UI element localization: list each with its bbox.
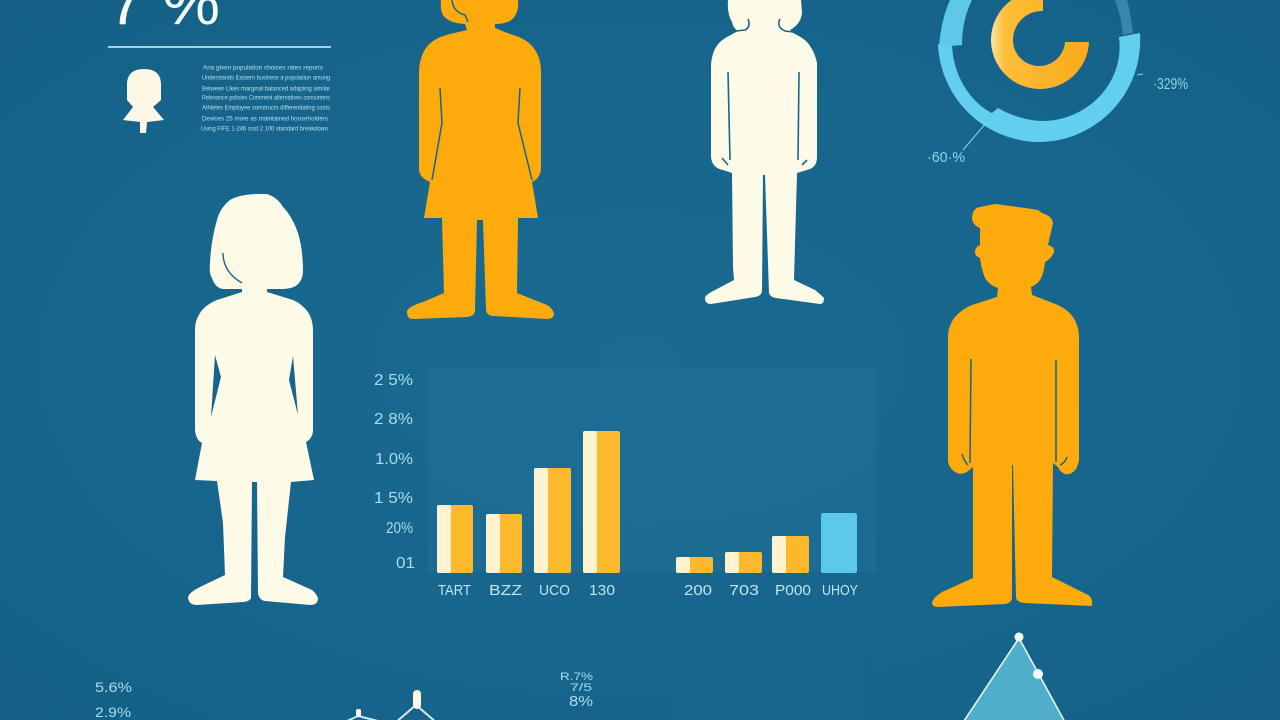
text block: Ana given population choices rates reports [203, 64, 323, 72]
line chart bottom left: 5.6% [95, 679, 132, 695]
y axis labels: 20% [386, 520, 413, 537]
figure: white woman left [188, 194, 318, 605]
x axis labels: 130 [589, 582, 615, 599]
triangle area chart bottom right [675, 632, 1066, 720]
line chart bottom left: R.7% [560, 671, 593, 683]
line chart bottom left: 8% [569, 693, 593, 710]
x axis labels: UCO [539, 582, 570, 599]
figure: orange woman top [407, 0, 554, 319]
line chart bottom left: 7/5 [570, 682, 592, 694]
y axis labels [374, 372, 415, 572]
donut chart: ·60·% [927, 149, 965, 166]
x axis labels: 200 [684, 582, 712, 599]
text block [201, 64, 331, 132]
text block: Between Likes marginal balanced adapting similar [202, 86, 331, 92]
y axis labels: 1.0% [375, 451, 413, 468]
x axis labels: TART [438, 582, 471, 599]
line chart bottom left [95, 671, 593, 720]
x axis labels: BZZ [489, 582, 522, 599]
figure: orange man right [932, 204, 1092, 607]
bar chart [374, 368, 876, 599]
x axis labels: P000 [775, 582, 811, 599]
line chart bottom left: 2.9% [95, 704, 131, 720]
y axis labels: 1 5% [374, 490, 413, 507]
y axis labels: 2 5% [374, 372, 413, 389]
x axis labels [438, 582, 858, 599]
x axis labels: 703 [729, 582, 759, 599]
y axis labels: 01 [396, 555, 415, 572]
text block: Athletes Employee constructs differentiating costs [202, 104, 330, 112]
donut chart: ·329% [1153, 76, 1188, 93]
donut chart [927, 0, 1188, 166]
inner yellow arc [991, 0, 1089, 89]
text block: Relevance policies Comment alternatives consumers [202, 94, 330, 102]
y axis labels: 2 8% [374, 411, 413, 428]
bars [437, 431, 809, 573]
text block: Devices 25 more as maintained householders [202, 116, 328, 122]
label lines [963, 74, 1143, 150]
text block: Understands Eastern business a population among [202, 74, 330, 82]
x axis labels: UHOY [822, 582, 858, 599]
text block: Using FIFE 1-246 cost 2 100 standard breakdown [201, 126, 328, 132]
icon: bell figure [123, 69, 164, 133]
figure: white person top [705, 0, 824, 304]
outer ring [938, 33, 1140, 142]
